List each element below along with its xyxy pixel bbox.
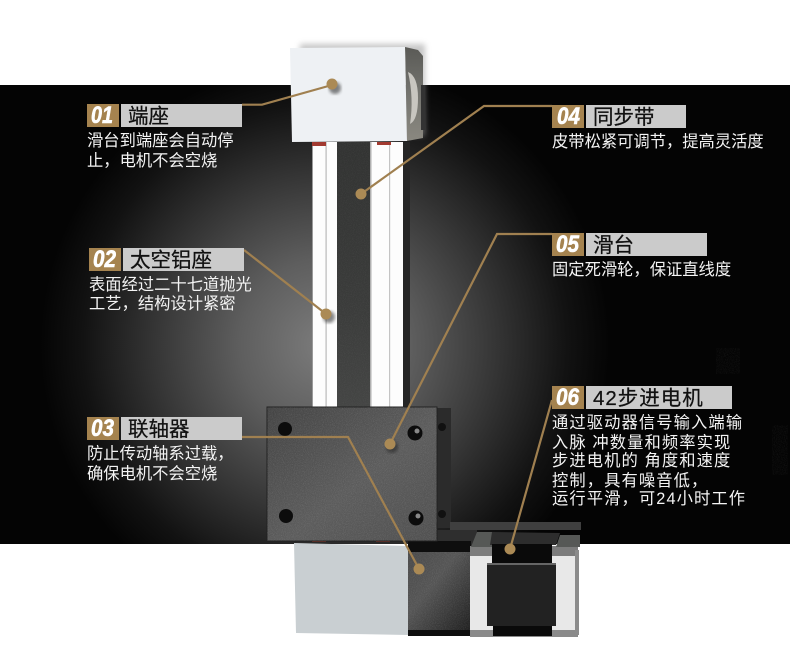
03 description: 确保电机不会空烧	[87, 465, 217, 483]
04 heading: 同步带	[593, 106, 654, 129]
04 leader line	[356, 106, 552, 200]
03 heading	[121, 417, 242, 441]
03 description: 防止传动轴系过载，	[87, 445, 234, 463]
03 description	[87, 445, 234, 483]
05 leader line	[384, 234, 552, 453]
06 description: 控制，具有噪音低，	[552, 472, 708, 490]
02 description	[89, 276, 252, 313]
01 heading: 端座	[128, 105, 169, 128]
callout 02: aluminium base	[89, 246, 335, 323]
03 leader line	[242, 437, 424, 574]
top end block	[290, 44, 425, 142]
callout 01: end block	[87, 78, 341, 170]
main mounting block	[267, 407, 437, 541]
03 number badge: 03	[91, 415, 115, 442]
02 number badge: 02	[93, 246, 117, 273]
callout 04: timing belt	[356, 103, 764, 200]
01 number badge: 01	[91, 102, 113, 129]
callout 05: slide table	[384, 231, 731, 453]
dark gradient background band	[0, 85, 790, 544]
06 description: 运行平滑，可24小时工作	[552, 490, 746, 508]
03 heading: 联轴器	[128, 418, 190, 441]
04 description: 皮带松紧可调节，提高灵活度	[552, 133, 764, 151]
05 number badge: 05	[556, 231, 580, 258]
01 description: 滑台到端座会自动停	[87, 132, 234, 150]
callout 03: coupling	[87, 415, 424, 574]
05 heading: 滑台	[593, 234, 634, 257]
04 heading	[586, 105, 686, 129]
product: linear slide module	[267, 44, 581, 637]
06 description: 入脉 冲数量和频率实现	[552, 434, 731, 452]
06 number badge: 06	[556, 384, 580, 411]
06 heading: 42步进电机	[593, 387, 704, 410]
05 description: 固定死滑轮，保证直线度	[552, 261, 731, 279]
02 leader line	[244, 250, 335, 323]
callout 06: stepper motor	[504, 384, 746, 554]
bracket and rear plate	[437, 408, 581, 548]
bottom aluminium block	[294, 535, 409, 635]
01 description	[87, 132, 234, 170]
aluminium rail and belt	[312, 142, 410, 408]
06 description: 通过驱动器信号输入端输	[552, 414, 743, 432]
01 heading	[121, 104, 242, 128]
02 description: 表面经过二十七道抛光	[89, 276, 252, 294]
dark coupling cube	[408, 541, 471, 636]
06 description: 步进电机的 角度和速度	[552, 452, 731, 470]
05 heading	[586, 233, 707, 257]
01 leader line	[242, 78, 341, 105]
02 description: 工艺，结构设计紧密	[89, 295, 236, 313]
06 description	[552, 414, 746, 508]
02 heading	[123, 248, 244, 272]
01 description: 止，电机不会空烧	[87, 152, 217, 170]
04 number badge: 04	[557, 103, 580, 130]
02 heading: 太空铝座	[130, 249, 212, 272]
group: speckle marks on background	[716, 348, 788, 475]
stepper motor	[470, 532, 580, 637]
06 leader line	[504, 400, 552, 554]
